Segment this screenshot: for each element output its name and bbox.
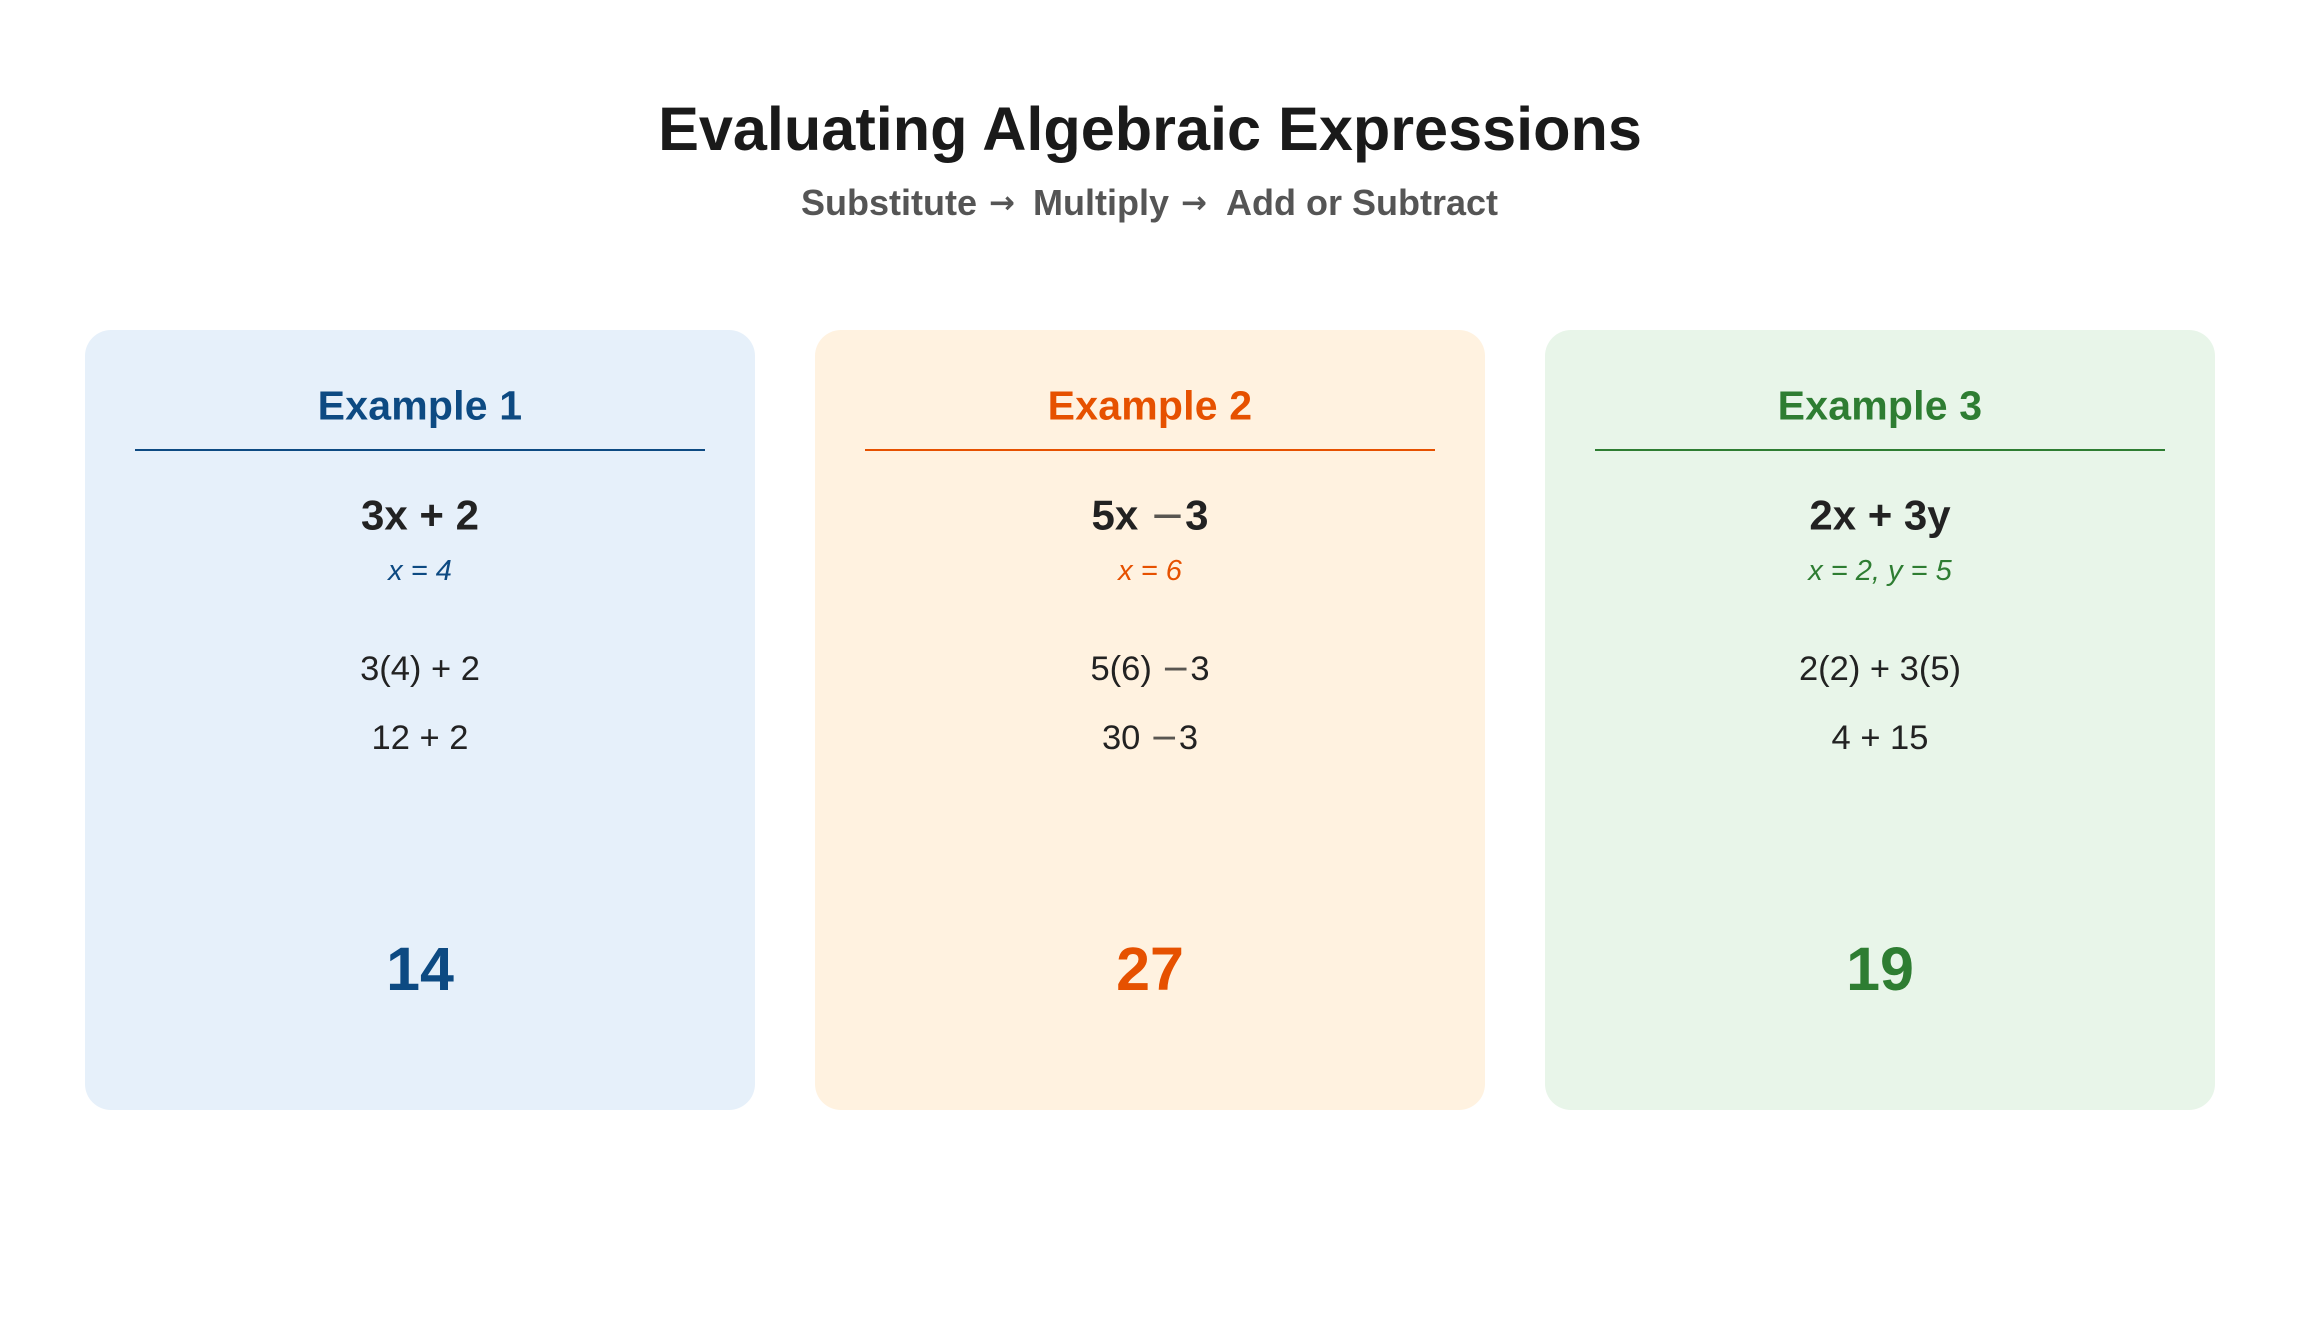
heading rule 2 <box>865 449 1435 451</box>
step: substitute 3: 2(2) + 3(5) <box>1799 650 1961 688</box>
heading rule 1 <box>135 449 705 451</box>
heading rule 3 <box>1595 449 2165 451</box>
expression 1: 3x + 2 <box>361 492 479 538</box>
step: multiply 2: 30 −3 <box>1102 718 1198 758</box>
variable value 3: x = 2, y = 5 <box>1806 555 1953 587</box>
card background 3 <box>1545 330 2215 1110</box>
subtitle: process steps: Substitute <box>801 182 977 223</box>
step: multiply 1: 12 + 2 <box>372 719 468 757</box>
title: Evaluating Algebraic Expressions <box>658 95 1642 163</box>
subtitle: process steps: Add or Subtract <box>1226 182 1498 223</box>
variable value 1: x = 4 <box>386 555 452 587</box>
subtitle: process steps: → <box>1181 185 1207 221</box>
expression 3: 2x + 3y <box>1809 492 1951 538</box>
card background 2 <box>815 330 1485 1110</box>
card background 1 <box>85 330 755 1110</box>
heading: example 3: Example 3 <box>1778 382 1982 428</box>
heading: example 1: Example 1 <box>318 382 522 428</box>
heading: example 2: Example 2 <box>1048 382 1252 428</box>
panel: example 2 <box>815 330 1485 1110</box>
subtitle: process steps <box>801 182 1498 223</box>
panel: example 3 <box>1545 330 2215 1110</box>
variable value 2: x = 6 <box>1116 555 1183 587</box>
expression 2: 5x −3 <box>1092 490 1208 540</box>
result 2: 27 <box>1116 935 1184 1003</box>
panel: example 1 <box>85 330 755 1110</box>
step: substitute 2: 5(6) −3 <box>1090 649 1210 689</box>
subtitle: process steps: Multiply <box>1033 182 1169 223</box>
step: multiply 3: 4 + 15 <box>1832 719 1928 757</box>
step: substitute 1: 3(4) + 2 <box>360 650 480 688</box>
result 3: 19 <box>1846 935 1914 1003</box>
subtitle: process steps: → <box>989 185 1015 221</box>
result 1: 14 <box>386 935 454 1003</box>
